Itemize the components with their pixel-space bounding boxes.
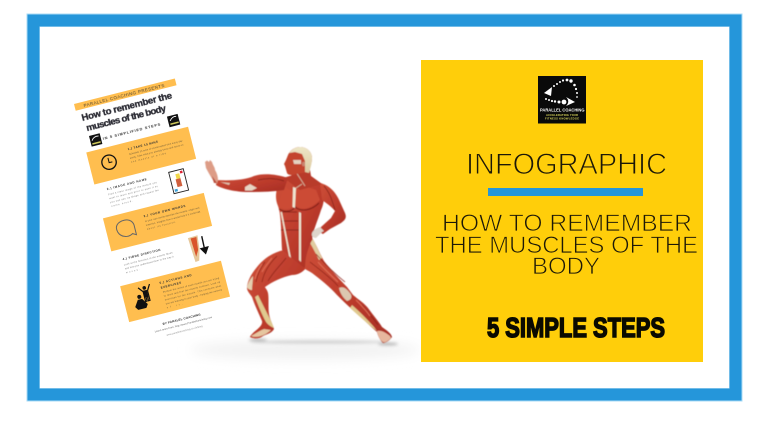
small logo left — [89, 133, 102, 147]
presenter banner — [74, 78, 177, 111]
step 5 band: Perform the action of each muscle you are trying — [163, 277, 220, 294]
sternum and abdominal tendons — [280, 187, 301, 262]
icon: speech bubble — [115, 218, 137, 239]
icon: down arrow — [198, 235, 209, 254]
tagline: 5 simple steps: 5 SIMPLE STEPS — [487, 312, 665, 343]
logo dots — [544, 79, 578, 106]
step 2 — [106, 168, 189, 209]
presenter banner: PARALLEL COACHING PRESENTS — [83, 83, 165, 108]
subtitle: IN 5 SIMPLIFIED STEPS — [102, 122, 161, 141]
step 3 band: insertion. Imagine how it would look if it could talk — [146, 210, 201, 227]
footer credit: Learn more from: http://www.ParallelCoaching.com — [155, 316, 212, 333]
pushing arm — [216, 174, 288, 192]
footer credit: www.parallelcoaching.co.uk/blog — [166, 325, 204, 337]
front leg — [302, 238, 392, 343]
step 2: Find a clear image of the muscle you — [108, 181, 158, 196]
sheet title: muscles of the body — [85, 103, 168, 134]
step 4: moves. — [126, 269, 140, 274]
heading: infographic: INFOGRAPHIC — [466, 148, 667, 181]
step 3 band: about its function. — [147, 221, 177, 231]
step 4: Look at the direction of the muscle fibres — [124, 251, 174, 267]
sheet background — [65, 71, 245, 354]
icon: muscle picture — [188, 235, 204, 262]
title text: HOW TO REMEMBER — [442, 210, 692, 237]
neck — [284, 170, 322, 190]
logo: ACCELERATING YOUR — [546, 113, 578, 117]
footer credit — [153, 310, 214, 339]
step 5 band: EXERCISES — [160, 281, 182, 290]
step 4: 4.) FIBRE DIRECTION — [122, 248, 161, 261]
footer credit: BY PARALEL COACHING — [162, 312, 202, 326]
title text: BODY — [532, 253, 600, 280]
floor shadow — [190, 339, 420, 359]
step 1 band — [86, 127, 196, 184]
step 2: want to learn and print or save it so — [109, 185, 159, 200]
step 1 band: one muscle at a time — [131, 152, 167, 164]
step 1 band: 1.) TAKE 15 MINS — [127, 140, 158, 151]
step 4: and how you understand them to the way it — [125, 255, 174, 270]
sheet title: How to remember the — [80, 90, 173, 124]
blue divider bar — [488, 188, 643, 196]
small logo right — [167, 114, 180, 127]
title text: THE MUSCLES OF THE — [435, 232, 698, 259]
step 3 band — [103, 193, 212, 251]
step 5 band: 5.) ACTIONS AND — [159, 273, 193, 285]
step 1 band: study. Take what you already know and focus on — [130, 143, 184, 160]
step 1 band: Schedule 15 mins of uninterrupted time every day — [129, 139, 184, 156]
step 2: 2.) IMAGE AND NAME — [106, 177, 147, 191]
logo — [538, 76, 586, 124]
step 5 band: you are learning to your body - helping the memory — [166, 288, 223, 306]
torso — [276, 174, 324, 268]
step 4 — [121, 233, 211, 279]
logo: FITNESS KNOWLEDGE — [545, 116, 579, 120]
raised hand — [205, 160, 218, 184]
step 2: you can see its shape and repeat the — [110, 189, 160, 204]
step 3 band: 3.) YOUR OWN WORDS — [143, 204, 186, 218]
muscle figure — [205, 147, 392, 343]
yellow title panel — [421, 60, 703, 362]
icon: exercising people — [131, 284, 155, 310]
pectoral shading — [278, 186, 320, 209]
step 2: name aloud. — [111, 201, 133, 208]
infographic thumbnail sheet — [65, 71, 245, 354]
bent arm — [317, 183, 346, 234]
title text — [435, 210, 698, 280]
step 3 band: In your own words describe the muscle: origin and — [145, 206, 200, 223]
back leg — [247, 250, 306, 338]
step 5 band: exercises for the muscle. This connects what — [165, 284, 222, 302]
icon: clock — [100, 153, 118, 171]
logo: PARALLEL COACHING — [540, 108, 584, 112]
step 5 band: to learn and feel the muscle contract. Look up — [164, 280, 221, 298]
step 5 band: of it. — [167, 302, 183, 309]
icon: muscle card — [169, 169, 189, 194]
head — [284, 147, 312, 175]
step 5 band — [120, 261, 230, 322]
